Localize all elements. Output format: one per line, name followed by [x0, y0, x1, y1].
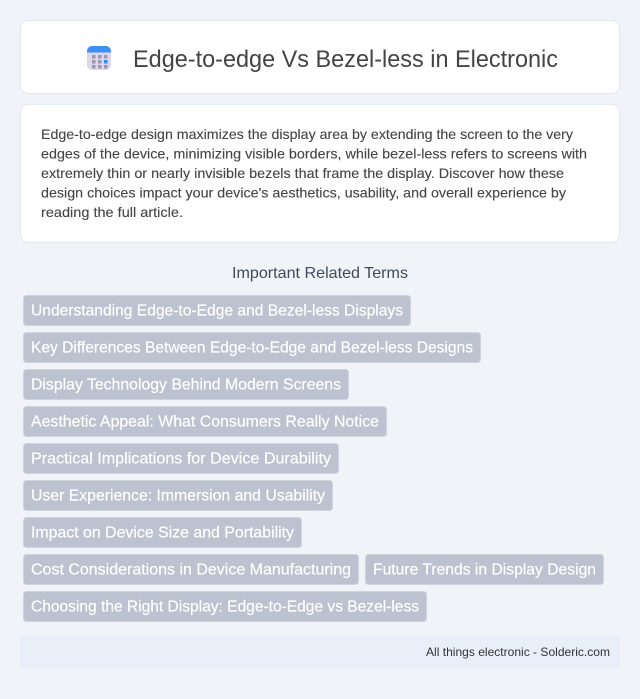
- tag: Aesthetic Appeal: What Consumers Really Notice: [31, 414, 379, 431]
- tag: [24, 554, 358, 584]
- text block: description: [41, 126, 587, 220]
- tag: Impact on Device Size and Portability: [31, 525, 294, 542]
- text block: description: reading the full article.: [41, 204, 183, 220]
- tag: [24, 370, 348, 400]
- tag: [24, 444, 338, 474]
- footer text: All things electronic - Solderic.com: [426, 645, 610, 659]
- tag: Future Trends in Display Design: [373, 562, 596, 579]
- tag: Practical Implications for Device Durability: [31, 451, 331, 468]
- heading: important related terms: Important Related Terms: [232, 265, 408, 282]
- tag: [24, 332, 480, 362]
- footer: [20, 635, 620, 669]
- tag: [24, 518, 302, 548]
- panel: description: [20, 104, 620, 242]
- tag: Key Differences Between Edge-to-Edge and Bezel-less Designs: [31, 340, 473, 357]
- text block: description: extremely thin or nearly invisible bezels that frame the display. Discover how these: [41, 165, 564, 181]
- icon: calendar: [87, 46, 111, 70]
- text block: description: Edge-to-edge design maximizes the display area by extending the screen to the very: [41, 126, 573, 142]
- panel: header: [20, 20, 620, 94]
- tag: [24, 406, 386, 436]
- tag: [24, 480, 332, 510]
- title: Edge-to-edge Vs Bezel-less in Electronic: [133, 46, 558, 73]
- tag: [366, 554, 604, 584]
- text block: description: design choices impact your device's aesthetics, usability, and overall experience by: [41, 184, 566, 200]
- tag: [24, 296, 410, 326]
- tag: Choosing the Right Display: Edge-to-Edge vs Bezel-less: [31, 599, 419, 616]
- tag: Cost Considerations in Device Manufacturing: [31, 562, 351, 579]
- tag: Display Technology Behind Modern Screens: [31, 377, 341, 394]
- tag list: [24, 296, 604, 622]
- text block: description: edges of the device, minimizing visible borders, while bezel-less refers to screens with: [41, 146, 587, 162]
- tag: User Experience: Immersion and Usability: [31, 488, 325, 505]
- tag: Understanding Edge-to-Edge and Bezel-less Displays: [31, 303, 403, 320]
- tag: [24, 592, 426, 622]
